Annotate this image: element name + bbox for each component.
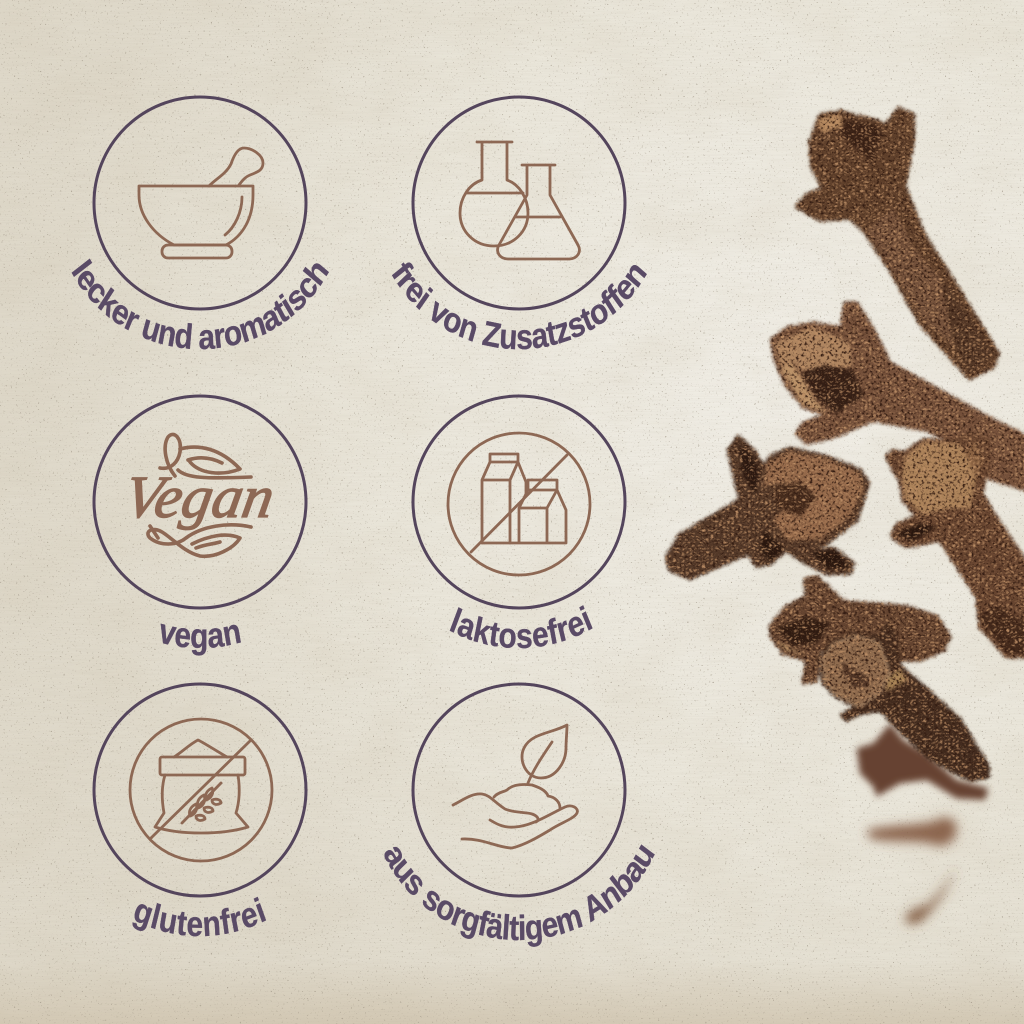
icon: vegan lettering with leaves: [120, 434, 279, 556]
clove 1 top: [797, 108, 998, 378]
clove 4 right: [887, 435, 1024, 657]
icon: vegan lettering with leaves: Vegan: [120, 464, 279, 531]
label: lecker und aromatisch: lecker und aromatisch: [72, 258, 329, 350]
label: laktosefrei: laktosefrei: [450, 605, 593, 648]
icon: mortar and pestle: [139, 148, 263, 258]
blurred clove mid: [867, 818, 957, 846]
icon: flour sack crossed out: [130, 719, 272, 861]
icon: milk cartons crossed out: [448, 433, 590, 575]
label: vegan: vegan: [160, 624, 241, 656]
label: aus sorgfältigem Anbau: aus sorgfältigem Anbau: [384, 844, 655, 947]
clove 5 middle: [770, 577, 950, 683]
panel: lecker und aromatisch: [72, 96, 329, 350]
panel: glutenfrei: [92, 682, 308, 936]
label: frei von Zusatzstoffen: frei von Zusatzstoffen: [392, 262, 647, 350]
panel: aus sorgfältigem Anbau: [384, 682, 655, 947]
panel: vegan: [92, 394, 308, 656]
label: glutenfrei: glutenfrei: [132, 896, 266, 936]
clove 6 lower: [818, 625, 988, 780]
icon: laboratory flasks: [460, 142, 579, 259]
clove 2: [772, 303, 1024, 490]
clove 3 left: [667, 437, 868, 578]
panel: laktosefrei: [412, 394, 626, 648]
blurred clove near: [857, 723, 988, 800]
photo: falling cloves: [667, 108, 1024, 924]
panel: frei von Zusatzstoffen: [392, 96, 647, 350]
blurred clove far: [905, 867, 957, 924]
icon: hand holding seedling: [453, 725, 577, 848]
